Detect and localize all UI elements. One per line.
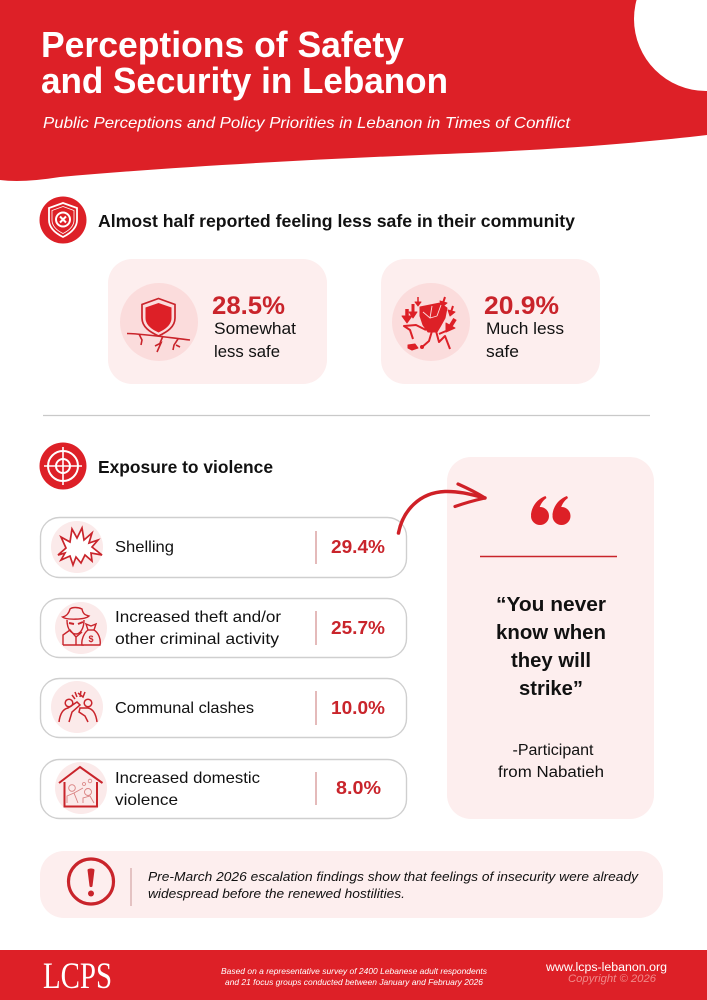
icon: shield with x [40, 196, 86, 244]
quote text [496, 594, 606, 700]
attribution [498, 742, 604, 781]
row: shelling [40, 518, 406, 578]
title: and Security in Lebanon [41, 60, 448, 101]
row: theft: 25.7% [331, 617, 385, 638]
icon: cracked shield [127, 298, 190, 352]
title: Perceptions of Safety [41, 24, 404, 65]
row: theft: $ [88, 634, 94, 644]
subtitle: Public Perceptions and Policy Priorities in Lebanon in Times of Conflict [43, 115, 571, 132]
heading: exposure to violence: Exposure to violence [98, 457, 273, 477]
row: communal clashes [40, 678, 406, 738]
panel: somewhat less safe: Somewhat [214, 319, 296, 338]
quote text: know when [496, 622, 606, 644]
row: shelling: Shelling [115, 539, 174, 556]
icon: fighting figures [59, 691, 97, 722]
panel: somewhat less safe: 28.5% [212, 292, 285, 320]
panel: somewhat less safe [108, 259, 327, 384]
panel: somewhat less safe: less safe [214, 342, 280, 361]
panel: much less safe: 20.9% [484, 292, 559, 320]
footer [0, 950, 707, 1000]
icon: house with figures [59, 767, 102, 806]
website: www.lcps-lebanon.org [545, 962, 667, 974]
panel: much less safe: Much less [486, 319, 564, 338]
icon: crumbling ground [402, 297, 455, 350]
quote text: strike” [519, 678, 583, 700]
quote text: “You never [496, 594, 606, 616]
row: domestic violence: Increased domestic [115, 770, 260, 787]
attribution: -Participant [512, 742, 594, 759]
row: shelling: 29.4% [331, 536, 385, 557]
callout: Pre-March 2026 escalation findings show that feelings of insecurity were already [148, 869, 640, 884]
icon: thief with money bag [62, 608, 100, 645]
callout [40, 851, 663, 918]
panel: much less safe [381, 259, 600, 384]
logo: LCPS: LCPS [43, 956, 112, 997]
header banner [0, 0, 707, 181]
title [41, 24, 448, 101]
row: theft: Increased theft and/or [115, 609, 282, 626]
source note: and 21 focus groups conducted between January and February 2026 [225, 977, 483, 987]
divider [43, 414, 650, 416]
heading: less safe: Almost half reported feeling less safe in their community [98, 211, 575, 231]
icon: target [40, 442, 86, 490]
row: theft: other criminal activity [115, 631, 279, 648]
row: theft [40, 598, 406, 658]
icon: exclamation [68, 859, 114, 904]
icon: quotation marks [531, 496, 570, 525]
row: domestic violence: 8.0% [336, 777, 381, 798]
callout: widespread before the renewed hostilities. [148, 886, 405, 901]
row: domestic violence [40, 760, 406, 818]
row: communal clashes: 10.0% [331, 697, 385, 718]
panel: quote [447, 457, 654, 819]
copyright: Copyright © 2026 [568, 973, 657, 985]
icon: explosion [58, 528, 102, 565]
source note [221, 966, 488, 987]
arrow [398, 484, 485, 533]
source note: Based on a representative survey of 2400 Lebanese adult respondents [221, 966, 488, 976]
quote text: they will [511, 650, 591, 672]
attribution: from Nabatieh [498, 764, 604, 781]
row: communal clashes: Communal clashes [115, 700, 254, 717]
row: domestic violence: violence [115, 792, 178, 809]
panel: much less safe: safe [486, 342, 519, 361]
